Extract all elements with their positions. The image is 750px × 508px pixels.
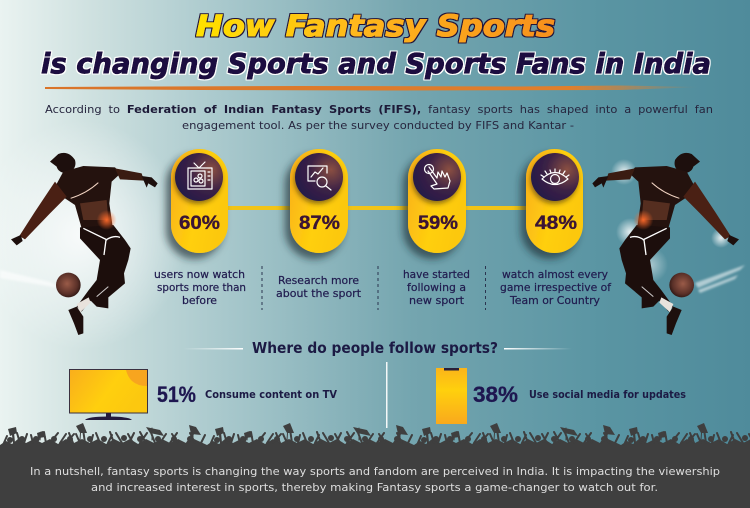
label (276, 274, 362, 300)
stat: social percent: 38% (473, 382, 518, 407)
crowd silhouette (0, 423, 750, 453)
title line one: How Fantasy Sports (196, 9, 555, 43)
pill (408, 149, 466, 253)
intro line two: engagement tool. As per the survey conducted by FIFS and Kantar - (182, 120, 574, 132)
footer panel (0, 452, 750, 508)
label: have started (403, 268, 470, 281)
label (154, 268, 246, 307)
label: following a (407, 281, 466, 294)
footer line one: In a nutshell, fantasy sports is changing the way sports and fandom are perceived in India. It is impacting the viewership (30, 465, 720, 478)
icon: television (175, 153, 223, 201)
stat card: 59 percent (403, 149, 470, 307)
stat: TV label: Consume content on TV (205, 389, 338, 401)
title line two: is changing Sports and Sports Fans in India (41, 47, 711, 80)
label (403, 268, 470, 307)
divider one (261, 266, 263, 310)
label (500, 268, 612, 307)
divider three (484, 266, 486, 310)
pill (526, 149, 583, 253)
divider two (377, 266, 379, 310)
icon: pointing hand (413, 153, 461, 201)
connector line (228, 206, 526, 210)
label: game irrespective of (500, 281, 612, 294)
label: about the sport (276, 287, 362, 300)
intro paragraph (45, 104, 713, 132)
label: Research more (278, 274, 359, 287)
vertical divider (386, 362, 388, 428)
right player glow (611, 159, 745, 293)
pill (290, 149, 348, 253)
icon: smartphone (436, 368, 467, 424)
label: before (182, 294, 217, 307)
section heading: Where do people follow sports? (252, 339, 498, 357)
footer line two: and increased interest in sports, thereby making Fantasy sports a game-changer to watch out for. (91, 481, 658, 494)
stat card: 48 percent (500, 149, 612, 307)
percent: 48% (535, 212, 577, 234)
stat: TV percent: 51% (157, 382, 196, 407)
intro line one: According to Federation of Indian Fantasy Sports (FIFS), fantasy sports has shaped into a powerful fan (45, 104, 713, 116)
title (41, 9, 711, 80)
pill (171, 149, 228, 253)
stat: social label: Use social media for updates (529, 389, 686, 401)
percent: 59% (418, 212, 458, 234)
percent: 87% (299, 212, 340, 234)
label: watch almost every (502, 268, 608, 281)
label: users now watch (154, 268, 245, 281)
label: Team or Country (509, 294, 600, 307)
stat card: 60 percent (154, 149, 246, 307)
title underline brush stroke (45, 86, 700, 90)
icon: television set (70, 370, 148, 420)
percent: 60% (179, 212, 220, 234)
right player illustration (592, 153, 739, 335)
label: sports more than (157, 281, 246, 294)
left player glow (0, 120, 187, 350)
left player illustration (11, 153, 158, 335)
stat card: 87 percent (276, 149, 362, 300)
icon: eye (531, 153, 579, 201)
icon: research chart with magnifier (295, 153, 343, 201)
label: new sport (409, 294, 465, 307)
